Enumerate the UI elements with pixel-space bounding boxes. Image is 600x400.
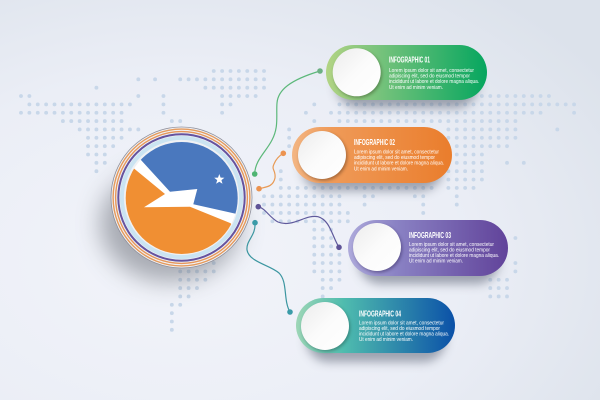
text block 03 [409, 242, 499, 265]
text block 03: Ut enim ad minim veniam. [409, 259, 463, 265]
text block 03: Lorem ipsum dolor sit amet, consectetur [409, 242, 494, 248]
text block 04: Ut enim ad minim veniam. [359, 337, 413, 343]
placeholder circle 02 [298, 131, 347, 181]
text block 02 [354, 150, 444, 172]
flag badge [100, 120, 252, 282]
text block 02: incididunt ut labore et dolore magna aliqua. [354, 161, 444, 167]
flag blue field [140, 142, 238, 214]
placeholder circle 01 [333, 48, 382, 98]
panel: infographic 03 [348, 220, 508, 284]
panel: infographic 02 [292, 127, 452, 191]
text block 04 [359, 320, 449, 343]
dotted world map [21, 71, 582, 330]
connector: purple [255, 204, 342, 250]
placeholder circle 04 [301, 302, 350, 352]
icon: star [214, 174, 224, 184]
placeholder circle 03 [353, 223, 402, 273]
text block 02: adipiscing elit, sed do eiusmod tempor [354, 155, 435, 161]
text block 03: adipiscing elit, sed do eiusmod tempor [409, 247, 490, 253]
connector: teal [247, 220, 293, 315]
text block 04: incididunt ut labore et dolore magna aliqua. [359, 332, 449, 338]
connector: orange [256, 150, 286, 192]
text block 01: adipiscing elit, sed do eiusmod tempor [389, 74, 470, 80]
panel: infographic 04 [296, 298, 455, 362]
text block 02: Ut enim ad minim veniam. [354, 166, 408, 172]
flag orange field [126, 168, 231, 254]
text block 03: incididunt ut labore et dolore magna aliqua. [409, 253, 499, 259]
connector: green [252, 68, 323, 177]
heading 02: INFOGRAPHIC 02 [354, 137, 395, 147]
text block 04: adipiscing elit, sed do eiusmod tempor [359, 326, 440, 332]
heading 03: INFOGRAPHIC 03 [409, 230, 451, 240]
text block 01: incididunt ut labore et dolore magna aliqua. [389, 79, 479, 85]
badge rings [111, 127, 252, 268]
text block 01: Ut enim ad minim veniam. [389, 85, 443, 91]
heading 01: INFOGRAPHIC 01 [389, 54, 430, 64]
badge shadow [100, 166, 240, 282]
panel: infographic 01 [326, 45, 487, 108]
text block 04: Lorem ipsum dolor sit amet, consectetur [359, 320, 444, 326]
flag [126, 142, 238, 254]
text block 01: Lorem ipsum dolor sit amet, consectetur [389, 68, 474, 74]
heading 04: INFOGRAPHIC 04 [359, 308, 401, 318]
text block 02: Lorem ipsum dolor sit amet, consectetur [354, 150, 439, 156]
text block 01 [389, 68, 479, 91]
